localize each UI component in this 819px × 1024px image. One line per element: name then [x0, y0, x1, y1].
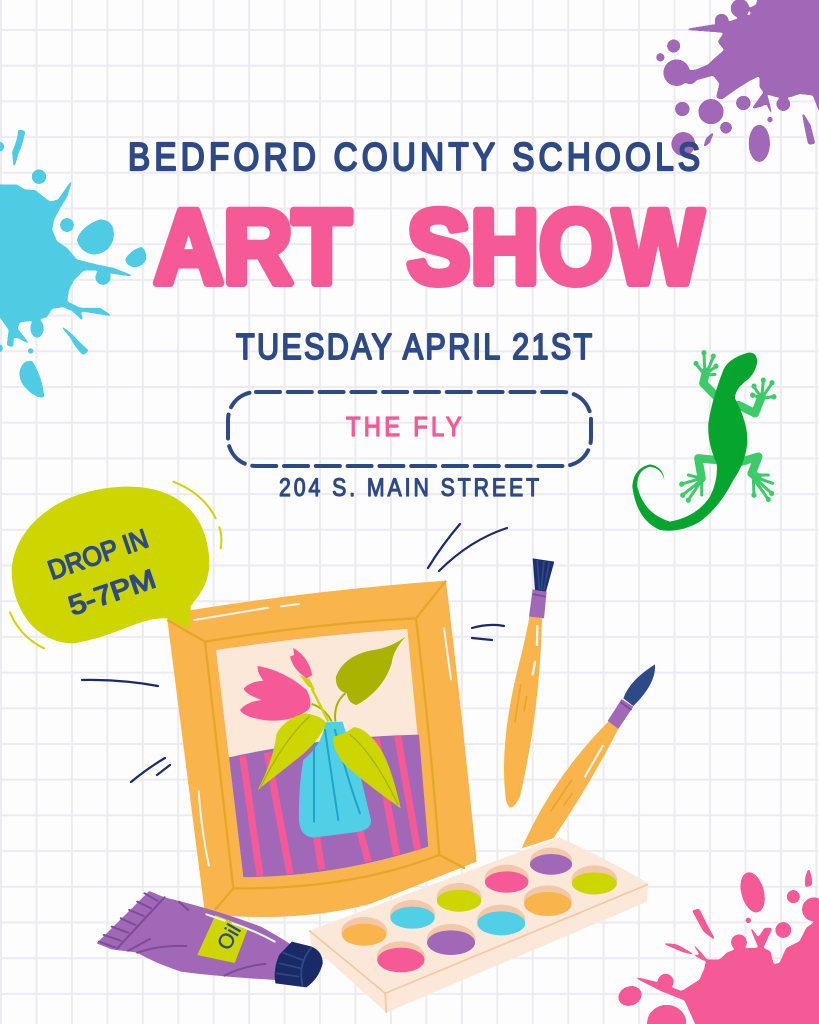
- paint palette: [309, 837, 648, 1013]
- art show title: ART: [154, 189, 351, 306]
- bubble text: hours: 5-7PM: [65, 564, 160, 621]
- blue paint splat: [0, 130, 146, 397]
- speech bubble: [10, 482, 221, 648]
- picture frame with flower painting: [167, 581, 477, 917]
- icon: green gecko: [632, 353, 774, 531]
- motion lines around frame: [82, 524, 507, 782]
- purple paint splat: [657, 0, 819, 161]
- art show title: SHOW: [407, 189, 703, 306]
- address: 204 S. MAIN STREET: [279, 473, 539, 501]
- paintbrush two: [522, 664, 655, 848]
- illustration: artist supplies: [10, 482, 655, 1013]
- tube label text: Oil: [213, 920, 246, 954]
- paintbrush one: [504, 558, 554, 808]
- art show title: [154, 189, 703, 306]
- venue box: [228, 392, 591, 466]
- oil paint tube: [97, 891, 323, 987]
- venue name: THE FLY: [346, 410, 462, 442]
- bubble text: drop in: DROP IN: [44, 523, 152, 586]
- school name heading: BEDFORD COUNTY SCHOOLS: [128, 134, 700, 179]
- pink paint splat: [616, 869, 819, 1024]
- date: TUESDAY APRIL 21ST: [236, 328, 592, 368]
